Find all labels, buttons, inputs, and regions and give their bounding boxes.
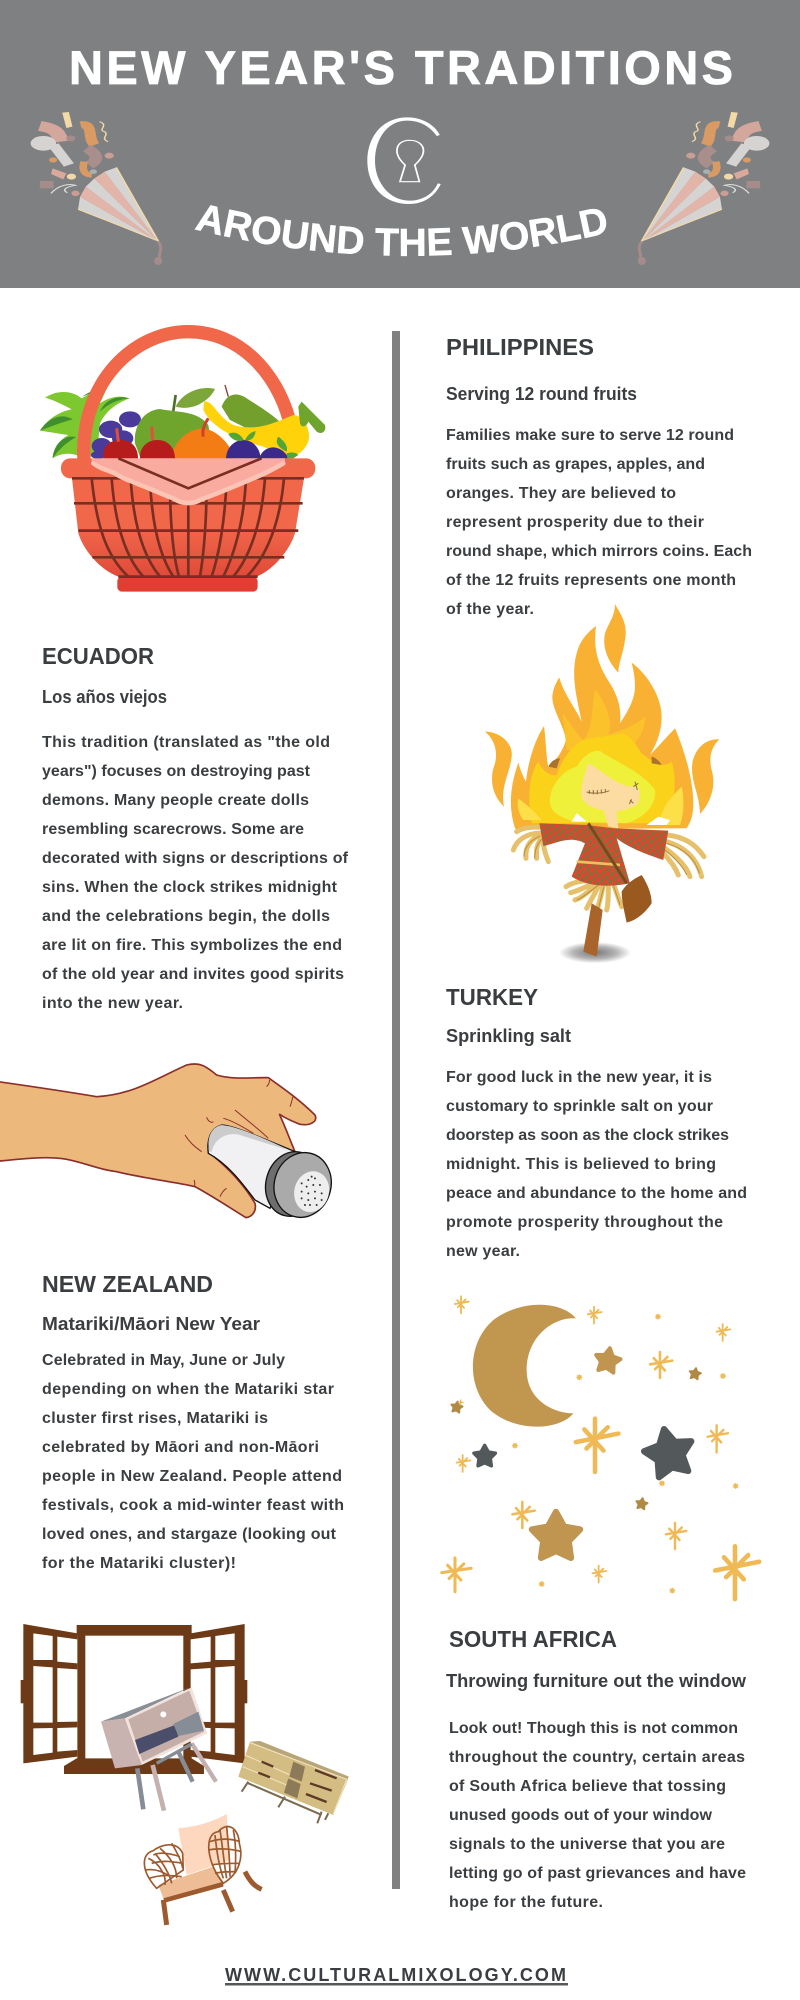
body text: Look out! Though this is not common: [449, 1720, 738, 1737]
body text: [42, 1352, 344, 1572]
body text: celebrated by Māori and non-Māori: [42, 1439, 319, 1456]
subheading: Serving 12 round fruits: [446, 383, 637, 404]
subheading: Throwing furniture out the window: [446, 1670, 747, 1691]
body text: [42, 734, 349, 1012]
heading: SOUTH AFRICA: [449, 1626, 617, 1652]
body text: new year.: [446, 1243, 520, 1260]
icon: burning scarecrow: [485, 604, 719, 963]
heading: PHILIPPINES: [446, 334, 594, 360]
footer website link: WWW.CULTURALMIXOLOGY.COM: [225, 1965, 566, 1985]
body text: sins. When the clock strikes midnight: [42, 879, 338, 896]
subheading: Sprinkling salt: [446, 1025, 571, 1046]
heading: NEW ZEALAND: [42, 1271, 213, 1297]
heading: TURKEY: [446, 984, 538, 1010]
body text: cluster first rises, Matariki is: [42, 1410, 268, 1427]
body text: of the 12 fruits represents one month: [446, 572, 736, 589]
body text: unused goods out of your window: [449, 1807, 713, 1824]
wicker chair: [144, 1814, 262, 1925]
body text: Families make sure to serve 12 round: [446, 427, 734, 444]
body text: resembling scarecrows. Some are: [42, 821, 304, 838]
icon: fruit basket: [40, 332, 325, 592]
body text: are lit on fire. This symbolizes the end: [42, 937, 342, 954]
sparkles: [442, 1296, 759, 1599]
center divider: [392, 331, 400, 1889]
body text: people in New Zealand. People attend: [42, 1468, 342, 1485]
section: Ecuador: [42, 643, 349, 1012]
body text: throughout the country, certain areas: [449, 1749, 745, 1766]
subtitle: around the world: AROUND THE WORLD: [194, 205, 606, 256]
body text: of South Africa believe that tossing: [449, 1778, 726, 1795]
body text: depending on when the Matariki star: [42, 1381, 334, 1398]
heading: ECUADOR: [42, 643, 154, 669]
section: Turkey: [446, 984, 747, 1260]
body text: decorated with signs or descriptions of: [42, 850, 349, 867]
body text: for the Matariki cluster)!: [42, 1555, 236, 1572]
body text: of the old year and invites good spirits: [42, 966, 344, 983]
body text: [446, 1069, 747, 1260]
body text: loved ones, and stargaze (looking out: [42, 1526, 337, 1543]
moon: [473, 1305, 576, 1427]
body text: signals to the universe that you are: [449, 1836, 725, 1853]
body text: festivals, cook a mid-winter feast with: [42, 1497, 344, 1514]
dresser: [238, 1741, 349, 1823]
body text: Celebrated in May, June or July: [42, 1352, 285, 1369]
body text: promote prosperity throughout the: [446, 1214, 723, 1231]
subheading: Los años viejos: [42, 686, 167, 707]
body text: of the year.: [446, 601, 534, 618]
body text: doorstep as soon as the clock strikes: [446, 1127, 729, 1144]
icon: party popper left: [31, 112, 162, 265]
body text: hope for the future.: [449, 1894, 603, 1911]
section: New Zealand: [42, 1271, 344, 1572]
icon: hand with salt shaker: [0, 1064, 338, 1224]
body text: years") focuses on destroying past: [42, 763, 311, 780]
body text: and the celebrations begin, the dolls: [42, 908, 330, 925]
body text: round shape, which mirrors coins. Each: [446, 543, 752, 560]
icon: party popper right: [638, 112, 769, 265]
subheading: Matariki/Māori New Year: [42, 1313, 260, 1334]
section: Philippines: [446, 334, 752, 618]
bedside cabinet: [101, 1687, 216, 1811]
title: NEW YEAR'S TRADITIONS: [69, 41, 733, 94]
icon: keyhole C logo: [367, 117, 441, 204]
body text: midnight. This is believed to bring: [446, 1156, 716, 1173]
body text: [446, 427, 752, 618]
body text: customary to sprinkle salt on your: [446, 1098, 713, 1115]
header banner: [0, 0, 800, 288]
body text: oranges. They are believed to: [446, 485, 676, 502]
body text: represent prosperity due to their: [446, 514, 704, 531]
body text: peace and abundance to the home and: [446, 1185, 747, 1202]
stars: [450, 1346, 702, 1558]
icon: window and furniture: [21, 1624, 349, 1925]
window: [21, 1624, 247, 1774]
section: South Africa: [446, 1626, 747, 1911]
body text: For good luck in the new year, it is: [446, 1069, 712, 1086]
icon: moon and stars: [442, 1296, 759, 1599]
body text: into the new year.: [42, 995, 183, 1012]
body text: demons. Many people create dolls: [42, 792, 309, 809]
body text: This tradition (translated as "the old: [42, 734, 330, 751]
body text: letting go of past grievances and have: [449, 1865, 746, 1882]
body text: [449, 1720, 746, 1911]
body text: fruits such as grapes, apples, and: [446, 456, 705, 473]
